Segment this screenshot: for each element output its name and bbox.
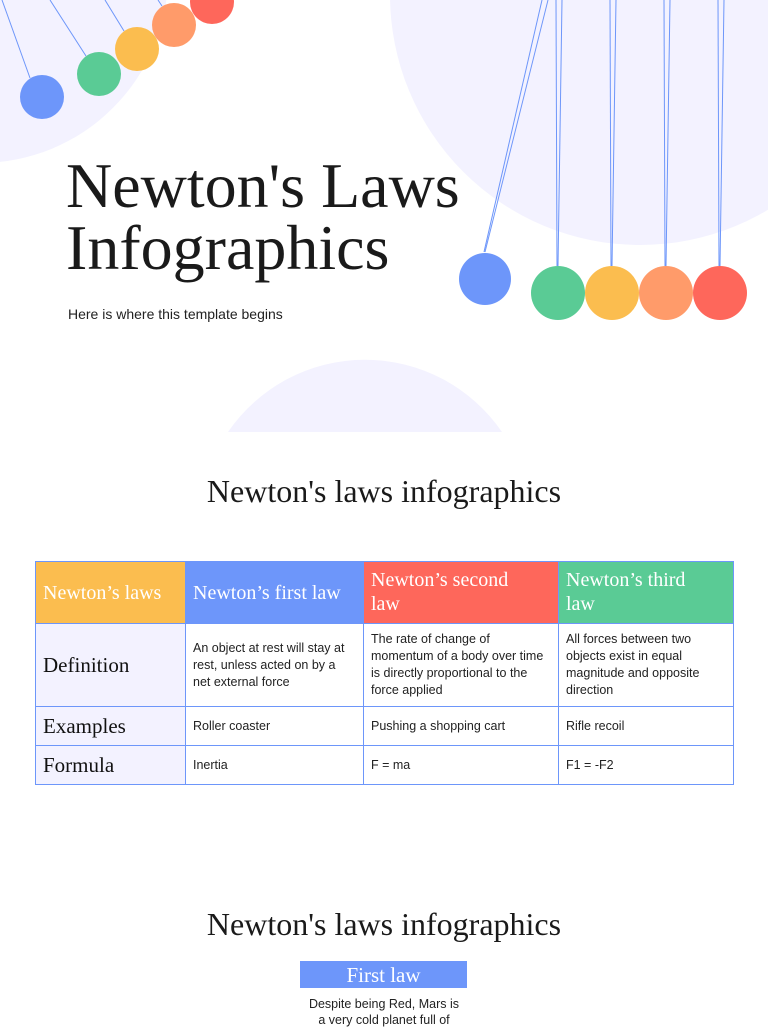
subtitle: Here is where this template begins <box>68 306 283 322</box>
section heading 1: Newton's laws infographics <box>207 473 561 509</box>
background decoration and pendulums <box>0 0 768 432</box>
comparison table: Inertia <box>193 758 228 772</box>
comparison table: F1 = -F2 <box>566 758 614 772</box>
comparison table: Examples <box>43 714 126 738</box>
comparison table <box>35 561 734 785</box>
comparison table: An object at rest will stay at rest, unless acted on by a net external force <box>193 640 344 688</box>
comparison table: Newton’s second law <box>371 569 508 615</box>
comparison table: Newton’s laws <box>43 582 161 604</box>
balls right <box>459 253 747 320</box>
comparison table: Rifle recoil <box>566 718 624 732</box>
title: Infographics <box>66 212 389 283</box>
section heading 2: Newton's laws infographics <box>207 906 561 942</box>
comparison table: Newton’s third law <box>566 569 685 615</box>
comparison table: Newton’s first law <box>193 582 341 604</box>
title <box>66 150 460 283</box>
comparison table: Roller coaster <box>193 718 270 732</box>
first law label <box>300 961 467 988</box>
comparison table: Formula <box>43 752 114 776</box>
comparison table: The rate of change of momentum of a body over time is directly proportional to the force applied <box>371 632 543 697</box>
comparison table: All forces between two objects exist in equal magnitude and opposite direction <box>566 632 699 697</box>
comparison table: Definition <box>43 652 129 676</box>
first law text: Despite being Red, Mars is a very cold planet full of <box>309 997 459 1027</box>
first law label: First law <box>346 963 421 987</box>
balls left <box>20 0 234 119</box>
title: Newton's Laws <box>66 150 460 221</box>
pendulum strings <box>2 0 724 266</box>
comparison table: F = ma <box>371 758 410 772</box>
comparison table: Pushing a shopping cart <box>371 718 505 732</box>
